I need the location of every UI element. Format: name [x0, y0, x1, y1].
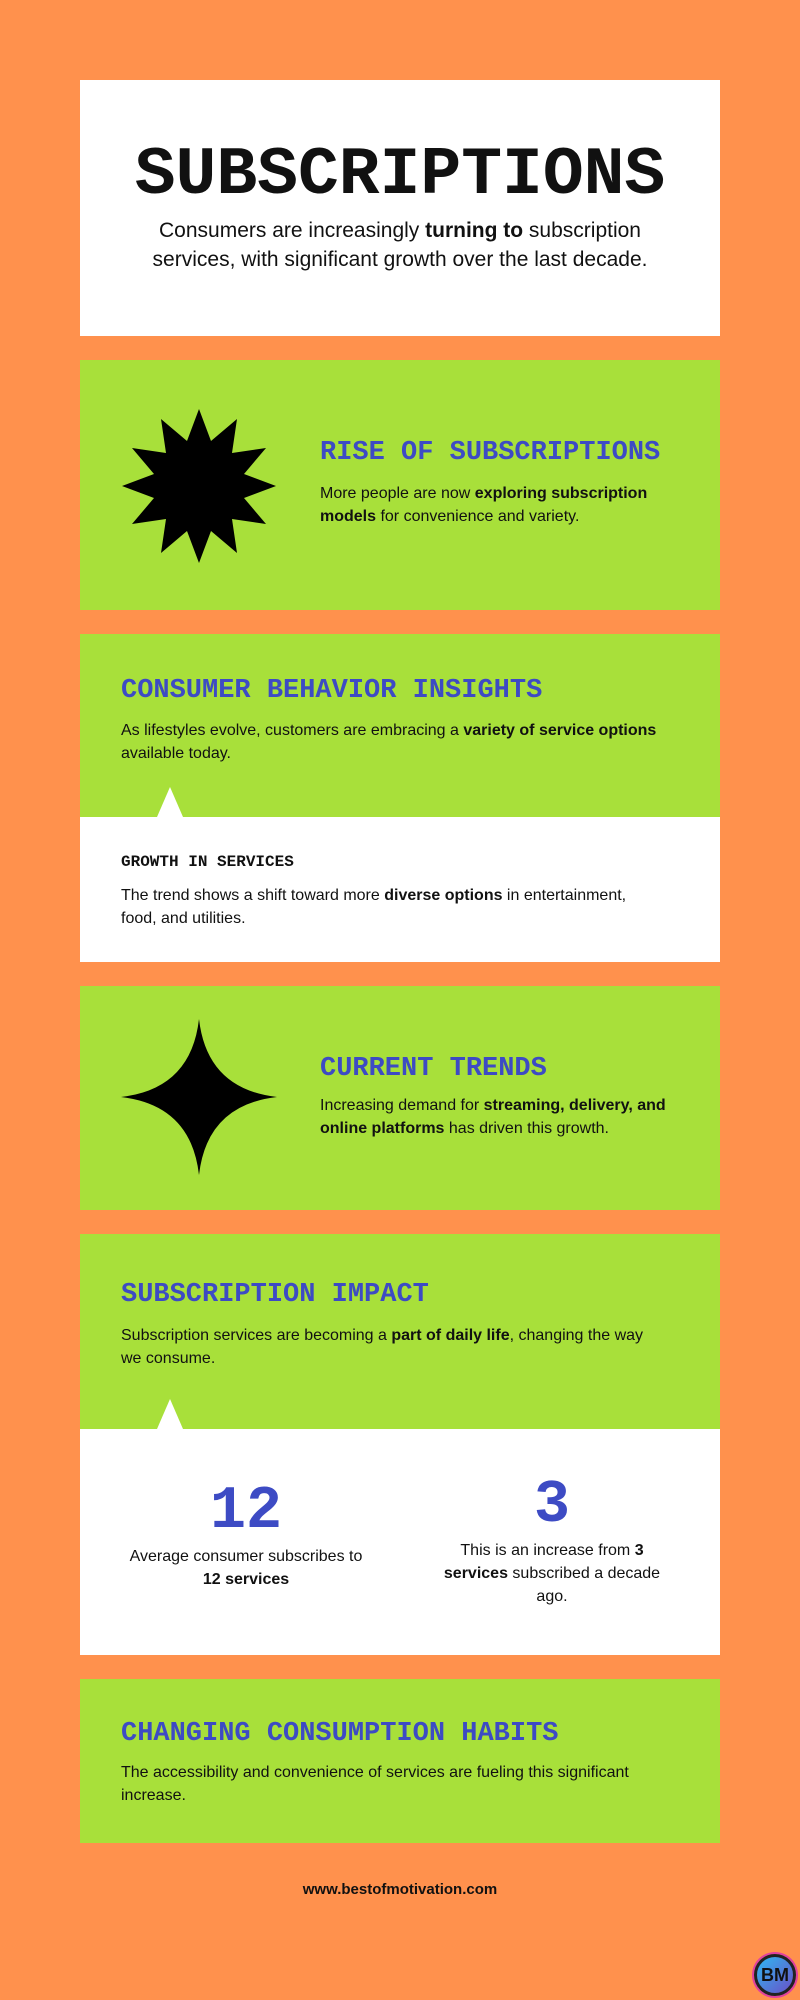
heading: RISE OF SUBSCRIPTIONS	[320, 438, 660, 468]
heading: CONSUMER BEHAVIOR INSIGHTS	[121, 676, 542, 706]
pointer	[157, 787, 183, 817]
text: The accessibility and convenience of services are fueling this significant	[121, 1764, 629, 1781]
icon: starburst	[122, 409, 276, 563]
text	[320, 1097, 666, 1137]
pointer	[157, 1399, 183, 1429]
panel: consumer behavior insights	[80, 634, 720, 817]
subtitle: Consumers are increasingly turning to subscription	[159, 219, 641, 242]
subtitle	[153, 219, 647, 271]
stat: 3: This is an increase from 3	[460, 1542, 644, 1559]
subheading: GROWTH IN SERVICES	[121, 853, 294, 871]
text: we consume.	[121, 1350, 215, 1367]
panel: rise of subscriptions	[80, 360, 720, 610]
stat: 3	[444, 1472, 660, 1605]
text: Subscription services are becoming a part of daily life, changing the way	[121, 1327, 643, 1344]
stat: 3: 3	[534, 1472, 570, 1540]
panel: statistics	[80, 1429, 720, 1655]
text: models for convenience and variety.	[320, 508, 579, 525]
icon: logo: BM	[761, 1965, 789, 1985]
icon: four-point star	[121, 1019, 277, 1175]
stat: 12	[130, 1478, 362, 1588]
text	[121, 722, 656, 762]
text: online platforms has driven this growth.	[320, 1120, 609, 1137]
text: food, and utilities.	[121, 910, 246, 927]
heading: SUBSCRIPTION IMPACT	[121, 1280, 429, 1310]
stat: 12: 12	[210, 1478, 282, 1546]
stat: 3: ago.	[536, 1588, 568, 1605]
subtitle: services, with significant growth over the last decade.	[153, 248, 647, 271]
panel: title	[80, 80, 720, 336]
icon: logo	[754, 1954, 796, 1996]
text	[121, 887, 626, 927]
panel: current trends	[80, 986, 720, 1210]
stat: 12: Average consumer subscribes to	[130, 1548, 362, 1565]
text: increase.	[121, 1787, 186, 1804]
text	[320, 485, 647, 525]
footer url: www.bestofmotivation.com	[303, 1881, 497, 1898]
stat: 3: services subscribed a decade	[444, 1565, 660, 1582]
text	[121, 1764, 629, 1804]
text: As lifestyles evolve, customers are embracing a variety of service options	[121, 722, 656, 739]
panel: changing consumption habits	[80, 1679, 720, 1843]
text: Increasing demand for streaming, delivery, and	[320, 1097, 666, 1114]
text: The trend shows a shift toward more diverse options in entertainment,	[121, 887, 626, 904]
heading: CURRENT TRENDS	[320, 1054, 547, 1084]
title: SUBSCRIPTIONS	[135, 137, 665, 214]
heading: CHANGING CONSUMPTION HABITS	[121, 1719, 558, 1749]
text	[121, 1327, 643, 1367]
text: available today.	[121, 745, 231, 762]
text: More people are now exploring subscription	[320, 485, 647, 502]
stat: 12: 12 services	[203, 1571, 289, 1588]
panel: subscription impact	[80, 1234, 720, 1429]
panel: growth in services	[80, 817, 720, 962]
